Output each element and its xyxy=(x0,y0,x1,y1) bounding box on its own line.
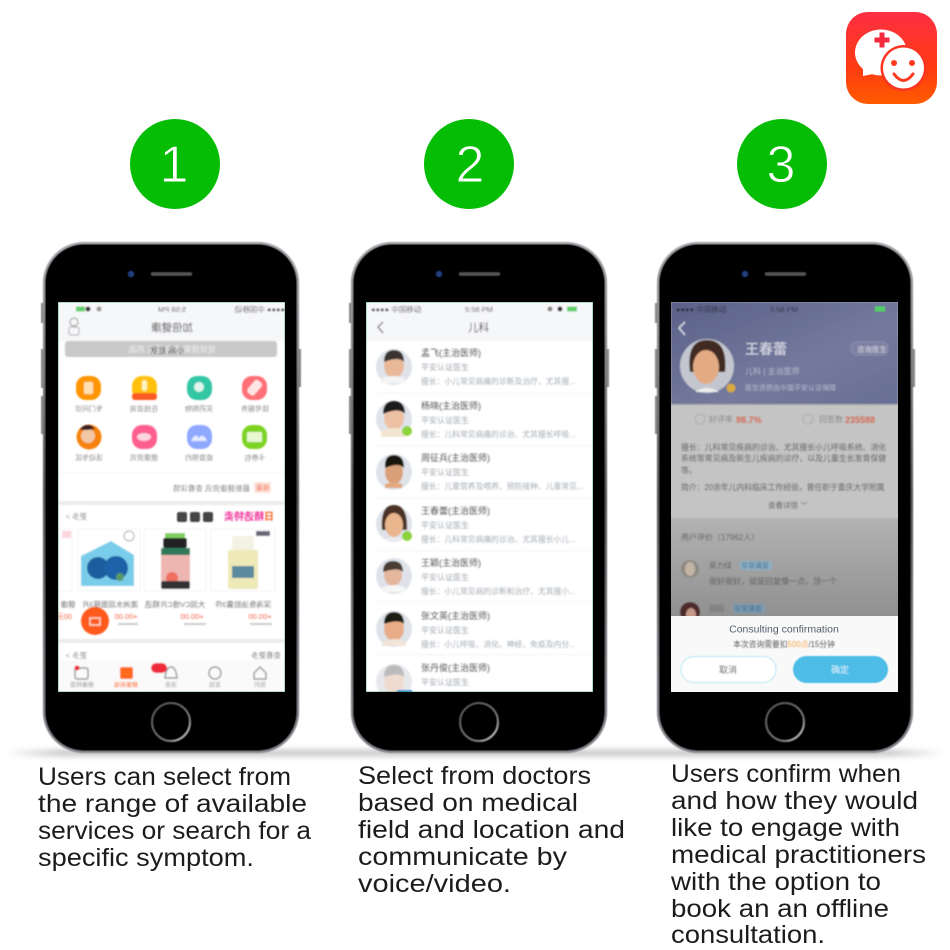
step badge 3: 3 xyxy=(767,136,795,194)
caption: step 2: communicate by xyxy=(358,843,568,871)
doctor bio xyxy=(681,442,886,510)
floor shadow under phones xyxy=(5,750,945,756)
product prices xyxy=(56,599,272,625)
more row: 查看更多 xyxy=(251,650,281,660)
step badge 2: 2 xyxy=(456,136,484,194)
caption: step 1 xyxy=(38,763,311,872)
service icons grid: 健康资讯 xyxy=(130,453,158,462)
service icons grid xyxy=(75,376,269,462)
product cards xyxy=(50,529,275,591)
doctor header: ●●●● 中国移动 xyxy=(676,304,727,314)
doctor row 7 xyxy=(376,662,490,692)
confirmation sheet: 确定 xyxy=(831,664,849,675)
phone 3 xyxy=(655,243,915,752)
search bar xyxy=(65,341,277,357)
doctor row 6: 平安认证医生 xyxy=(421,625,469,635)
caption: step 2: Select from doctors xyxy=(358,762,591,790)
rating stats: 98.7% xyxy=(736,415,762,425)
phone 2 frame xyxy=(349,243,609,752)
doctor row 1: 孟飞(主治医师) xyxy=(421,347,481,358)
caption: step 2: field and location and xyxy=(358,816,625,844)
doctor header: 医生资质由中国平安认证保障 xyxy=(745,383,836,392)
caption: step 3: consultation. xyxy=(671,921,825,949)
search bar: 小病 症状 xyxy=(150,345,184,355)
header bar: ●●●● 中国移动 xyxy=(371,304,422,314)
phone 1 xyxy=(41,243,301,752)
service icons grid: 卡券包 xyxy=(244,453,266,462)
product prices: 00元 xyxy=(56,612,72,621)
review list: 用户评价（17962人） xyxy=(681,532,759,542)
doctor header: 咨询医生 xyxy=(857,344,887,354)
caption: step 3 xyxy=(670,760,926,949)
doctor row 7: 平安认证医生 xyxy=(421,677,469,687)
doctor row 2 xyxy=(376,400,576,439)
step badge 2 xyxy=(424,119,514,209)
product prices: 健康 xyxy=(60,599,76,609)
products heading xyxy=(65,510,274,523)
caption: step 3: Users confirm when xyxy=(671,760,901,788)
doctor row 3: 擅长：儿童营养及喂养、预防接种、儿童常见... xyxy=(421,481,583,491)
doctor row 5: 擅长：小儿常见病的诊断和治疗、尤其擅小... xyxy=(421,586,576,596)
doctor row 3: 周征兵(主治医师) xyxy=(421,452,490,463)
review list: 很好很好，就是回复慢一点，顶一个 xyxy=(709,576,837,586)
confirmation sheet xyxy=(671,616,898,692)
tab bar: 我的 xyxy=(254,681,266,689)
doctor row 1: 擅长：小儿常见病痛的诊断及治疗、尤其擅... xyxy=(421,376,576,386)
caption: step 1: Users can select from xyxy=(38,763,291,791)
doctor row 2: 杨晓(主治医师) xyxy=(421,400,481,411)
product prices: 澳洲水润面膜3片 xyxy=(82,599,138,609)
service icons grid: 在线咨询 xyxy=(130,404,158,413)
doctor row 1: 平安认证医生 xyxy=(421,362,469,372)
confirmation sheet: Consulting confirmation xyxy=(729,624,839,636)
phone 2 screen: doctor list xyxy=(366,302,593,700)
caption: step 3: like to engage with xyxy=(671,814,900,842)
service icons grid: 挂号服务 xyxy=(241,404,269,413)
service icons grid: 专门问诊 xyxy=(75,404,103,413)
review list: 莫力绿 xyxy=(709,560,732,570)
doctor row 4 xyxy=(376,504,576,544)
service icons grid: 疫苗预约 xyxy=(185,453,213,462)
tab bar: 消息 xyxy=(165,681,177,689)
doctor row 2: 平安认证医生 xyxy=(421,415,469,425)
doctor header: 5:58 PM xyxy=(770,305,798,314)
tab bar: 健康档案 xyxy=(70,681,94,689)
header bar: 加倍健康 xyxy=(151,321,193,334)
phone 1 screen: services home xyxy=(50,302,285,692)
doctor row 1 xyxy=(376,348,576,386)
caption: step 1: the range of available xyxy=(38,790,307,818)
doctor row 2: 擅长：儿科常见病痛的诊治、尤其擅长呼吸... xyxy=(421,429,576,439)
cart button xyxy=(81,607,109,635)
rating stats xyxy=(671,404,898,425)
phone 2 xyxy=(349,243,609,752)
doctor bio: 查看详情 ﹀ xyxy=(768,500,808,510)
doctor row 5 xyxy=(376,558,576,596)
header bar: ●●●● 中国移动 xyxy=(234,304,285,314)
header bar: 5:58 PM xyxy=(158,305,186,314)
phone 1 frame xyxy=(41,243,301,752)
review list xyxy=(671,518,898,616)
rating stats: 235588 xyxy=(845,415,875,425)
step badge 3 xyxy=(737,119,827,209)
doctor row 4: 擅长：儿科常见病痛的诊治、尤其擅长小儿... xyxy=(421,534,576,544)
doctor bio: 简介：20余年儿内科临床工作经验，曾任职于重庆大学附属 xyxy=(681,482,885,492)
header bar: 儿科 xyxy=(468,321,489,334)
doctor header: 儿科 | 主治医师 xyxy=(745,366,800,376)
rating stats: 回答数 xyxy=(819,414,843,424)
caption: step 1: specific symptom. xyxy=(38,844,254,872)
caption: step 2: based on medical xyxy=(358,789,578,817)
doctor bio: 等。 xyxy=(681,465,697,475)
header bar xyxy=(58,302,285,341)
doctor bio: 系统等常见病及新生儿疾病的诊疗，以及儿童生长发育保健 xyxy=(681,453,886,463)
review list: 非常满意 xyxy=(741,561,769,570)
more row xyxy=(58,639,285,660)
confirmation sheet: 取消 xyxy=(719,664,737,675)
notice row: 最新 xyxy=(256,483,270,492)
rating stats: 好评率 xyxy=(709,414,733,424)
phone 3 frame xyxy=(655,243,915,752)
phone 3 screen: consultation confirmation xyxy=(665,302,905,692)
doctor row 5: 王颖(主治医师) xyxy=(421,557,481,568)
notice row: 最新健康资讯 查看详情 xyxy=(172,483,250,493)
more row: 更多 > xyxy=(65,650,87,660)
review list: 田田 xyxy=(709,604,724,613)
notice row xyxy=(58,482,284,505)
doctor row 3 xyxy=(376,452,583,491)
doctor row 6 xyxy=(376,610,576,649)
service icons grid: 活动专区 xyxy=(75,453,103,462)
product prices: 大润CV维C片精选 xyxy=(144,599,205,609)
products heading: 更多 > xyxy=(65,511,87,521)
product prices: 深海鱼油胶囊3件 xyxy=(214,599,271,609)
header bar: 5:58 PM xyxy=(465,305,493,314)
doctor header xyxy=(671,302,898,404)
caption: step 3: and how they would xyxy=(671,787,918,815)
doctor row 5: 平安认证医生 xyxy=(421,572,469,582)
product prices: +00.00 xyxy=(114,612,138,621)
doctor bio: 擅长：儿科常见疾病的诊治、尤其擅长小儿呼吸系统、消化 xyxy=(681,442,886,452)
beige bottle xyxy=(228,531,270,589)
product prices: +00.00 xyxy=(180,612,204,621)
dark bottle xyxy=(161,533,190,589)
caption: step 2: voice/video. xyxy=(358,870,511,898)
products heading: 日精选特卖 xyxy=(224,510,274,523)
tab bar: 健康商城 xyxy=(114,681,138,689)
caption: step 3: medical practitioners xyxy=(671,841,926,869)
search bar: 症状搜索 疾病 医生 药品 xyxy=(129,344,215,354)
caption: step 3: book an an offline xyxy=(671,895,889,923)
tab bar: 发现 xyxy=(209,681,221,689)
doctor row 4: 平安认证医生 xyxy=(421,520,469,530)
product prices: +00.00 xyxy=(248,612,272,621)
step badge 1: 1 xyxy=(160,136,188,194)
blue package xyxy=(81,531,134,586)
doctor row 6: 擅长：小儿呼吸、消化、神经、免疫及内分... xyxy=(421,639,576,649)
header bar xyxy=(366,302,593,341)
service icons grid: 买药购物 xyxy=(185,404,213,413)
doctor row 3: 平安认证医生 xyxy=(421,467,469,477)
doctor row 4: 王春蕾(主治医师) xyxy=(421,505,490,516)
doctor row 6: 张文英(主治医师) xyxy=(421,610,490,621)
doctor header: 王春蕾 xyxy=(745,341,787,357)
confirmation sheet: 本次咨询需要扣500点/15分钟 xyxy=(733,639,835,649)
review list: 非常满意 xyxy=(734,604,762,613)
doctor row 7: 张丹俊(主治医师) xyxy=(421,662,490,673)
caption: step 1: services or search for a xyxy=(38,817,311,845)
caption: step 3: with the option to xyxy=(670,868,881,896)
icon: app logo xyxy=(846,12,937,104)
caption: step 2 xyxy=(358,762,625,898)
step badge 1 xyxy=(130,119,220,209)
tab bar xyxy=(70,662,268,689)
